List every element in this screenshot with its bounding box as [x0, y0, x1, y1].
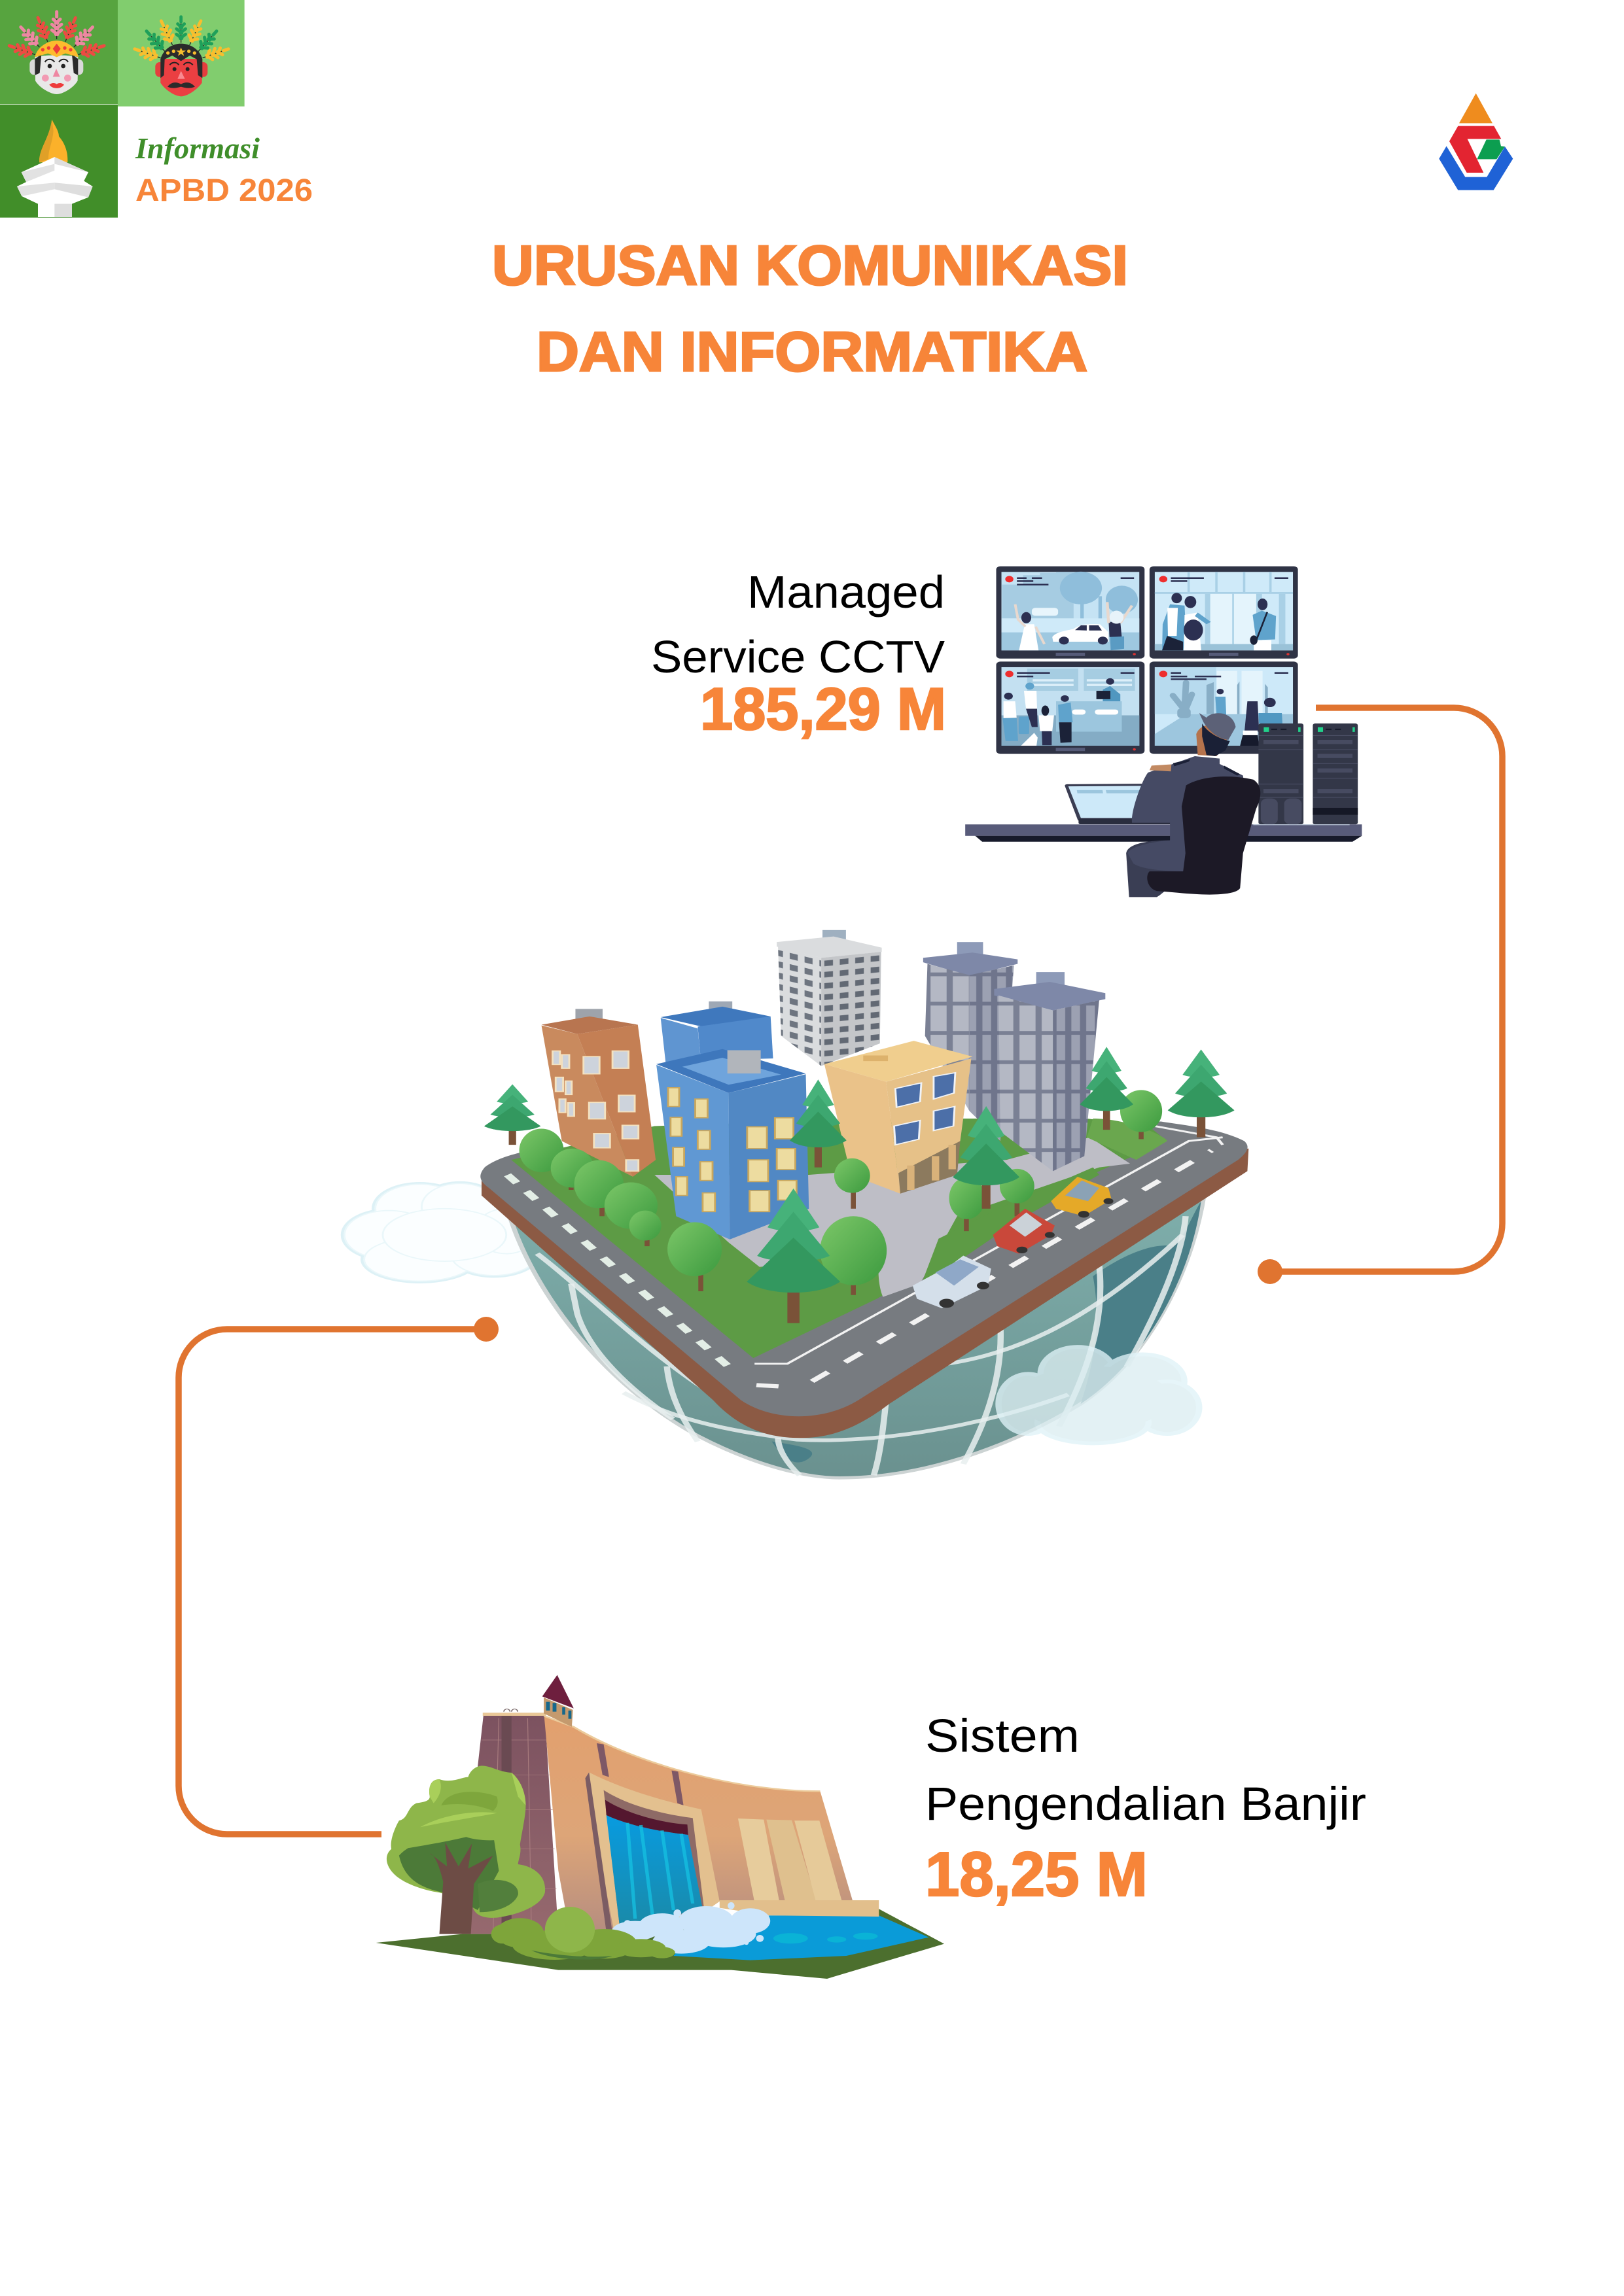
illustration: city on a globe [344, 930, 1248, 1478]
text block: Managed Service CCTV: Service CCTV [651, 631, 945, 682]
desk [965, 824, 1362, 842]
illustration: CCTV control room [965, 566, 1362, 897]
server rack left [1258, 723, 1303, 824]
white tower [777, 930, 882, 1066]
car: white [913, 1255, 991, 1308]
car: red [993, 1209, 1055, 1254]
title: URUSAN KOMUNIKASI [492, 235, 1128, 297]
icon: red ondel-ondel mask [133, 17, 230, 96]
water foam [612, 1902, 770, 1954]
text block: Managed Service CCTV: Managed [747, 566, 945, 617]
monitor: plaza scene [1150, 661, 1298, 754]
text block: Managed Service CCTV [651, 566, 946, 742]
seated operator [1126, 713, 1260, 897]
title [492, 235, 1128, 383]
grey tower front [994, 972, 1105, 1171]
ground and river [376, 1909, 944, 1979]
laptop [1065, 784, 1172, 824]
blue building front [656, 1049, 809, 1240]
tree [387, 1765, 545, 1934]
badge caption: Informasi: Informasi [135, 131, 260, 165]
dam wall [470, 1709, 853, 1934]
city platform [480, 1119, 1248, 1438]
car: yellow [1051, 1177, 1114, 1217]
concrete panels [738, 1818, 841, 1900]
header badge tiles [0, 0, 245, 218]
server rack right [1313, 723, 1358, 824]
icon: white ondel-ondel mask [8, 12, 105, 94]
blue building rear [661, 1001, 773, 1062]
icon: organisation logo [1439, 94, 1513, 190]
connector: CCTV to city [1258, 708, 1502, 1284]
connector: city to dam [179, 1317, 499, 1834]
cloud right [998, 1347, 1199, 1443]
text block: Managed Service CCTV: 185,29 M [700, 676, 946, 742]
globe hemisphere [508, 1194, 1204, 1478]
spillway gate and waterfall [585, 1772, 720, 1932]
monitor: lobby scene [1150, 566, 1298, 659]
trees [484, 1047, 1235, 1323]
monitor: street scene [996, 566, 1144, 659]
text block: Sistem Pengendalian Banjir: Sistem [925, 1711, 1080, 1762]
grey tower rear [923, 942, 1017, 1141]
illustration: dam with waterfall [376, 1675, 944, 1979]
text block: Sistem Pengendalian Banjir [925, 1711, 1366, 1909]
shrubs [491, 1907, 675, 1960]
beige building [824, 1041, 972, 1194]
text block: Sistem Pengendalian Banjir: Pengendalian Banjir [925, 1779, 1366, 1830]
badge caption: APBD 2026: APBD 2026 [135, 173, 313, 208]
cloud left [344, 1183, 537, 1281]
orange building [542, 1009, 656, 1177]
valve tower [542, 1675, 574, 1727]
text block: Sistem Pengendalian Banjir: 18,25 M [925, 1839, 1148, 1909]
icon: Monas monument [17, 120, 93, 217]
monitor: airport check-in scene [996, 661, 1144, 754]
title: DAN INFORMATIKA [537, 321, 1087, 383]
apron [720, 1900, 879, 1917]
